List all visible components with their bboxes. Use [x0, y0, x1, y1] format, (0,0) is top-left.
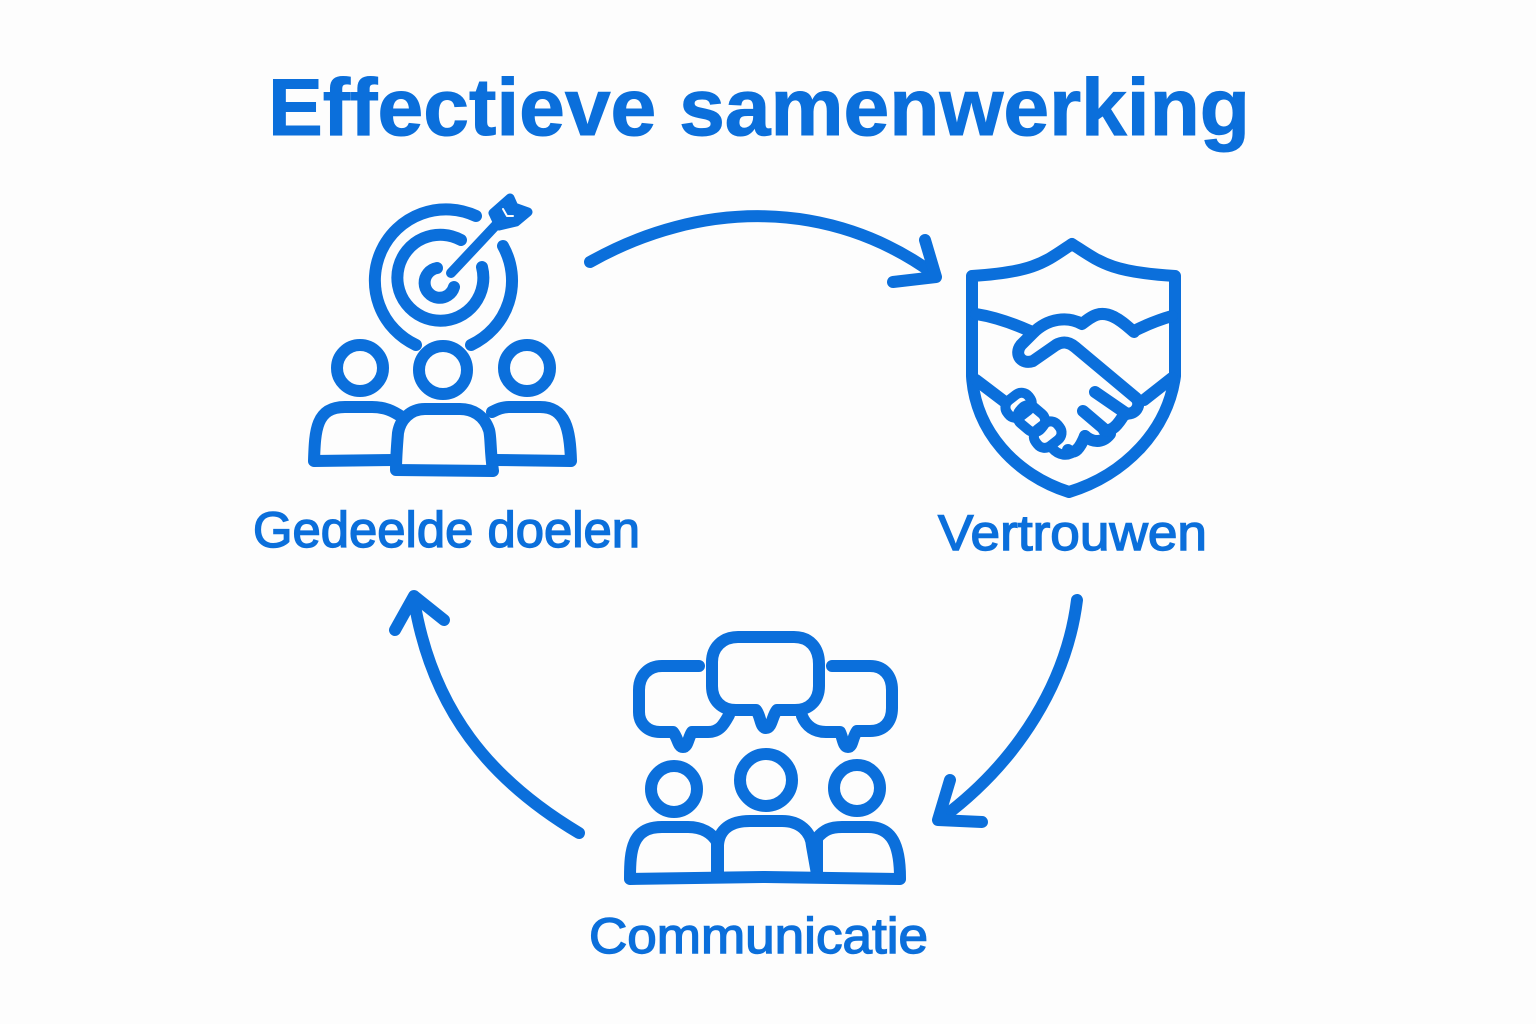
arrow in target: [451, 198, 528, 273]
left speech bubble: [639, 666, 729, 747]
baseline: [630, 877, 900, 879]
right person: [492, 345, 571, 461]
left person: [630, 766, 717, 878]
handshake: upper hand: [1018, 314, 1138, 452]
centre person: [396, 346, 493, 471]
handshake: lower fist: [1002, 389, 1076, 455]
right speech bubble: [802, 666, 892, 747]
cuff lines: [976, 314, 1172, 402]
left person: [314, 345, 402, 461]
icon: target with team: [314, 198, 571, 471]
label: Vertrouwen: Vertrouwen: [938, 505, 1207, 561]
arrow: goals to trust: [590, 216, 936, 282]
shield outline: [972, 244, 1175, 492]
target rings: [375, 209, 512, 345]
arrow: trust to communication: [938, 600, 1077, 822]
icon: shield with handshake: [972, 244, 1175, 492]
centre speech bubble: [712, 637, 819, 728]
arrow: communication to goals: [395, 596, 579, 833]
title: Effectieve samenwerking: [268, 63, 1250, 153]
label: Communicatie: Communicatie: [589, 908, 928, 964]
icon: team with speech bubbles: [630, 637, 900, 879]
right person: [817, 765, 900, 878]
label: Gedeelde doelen: Gedeelde doelen: [253, 502, 640, 558]
centre person: [718, 754, 817, 874]
